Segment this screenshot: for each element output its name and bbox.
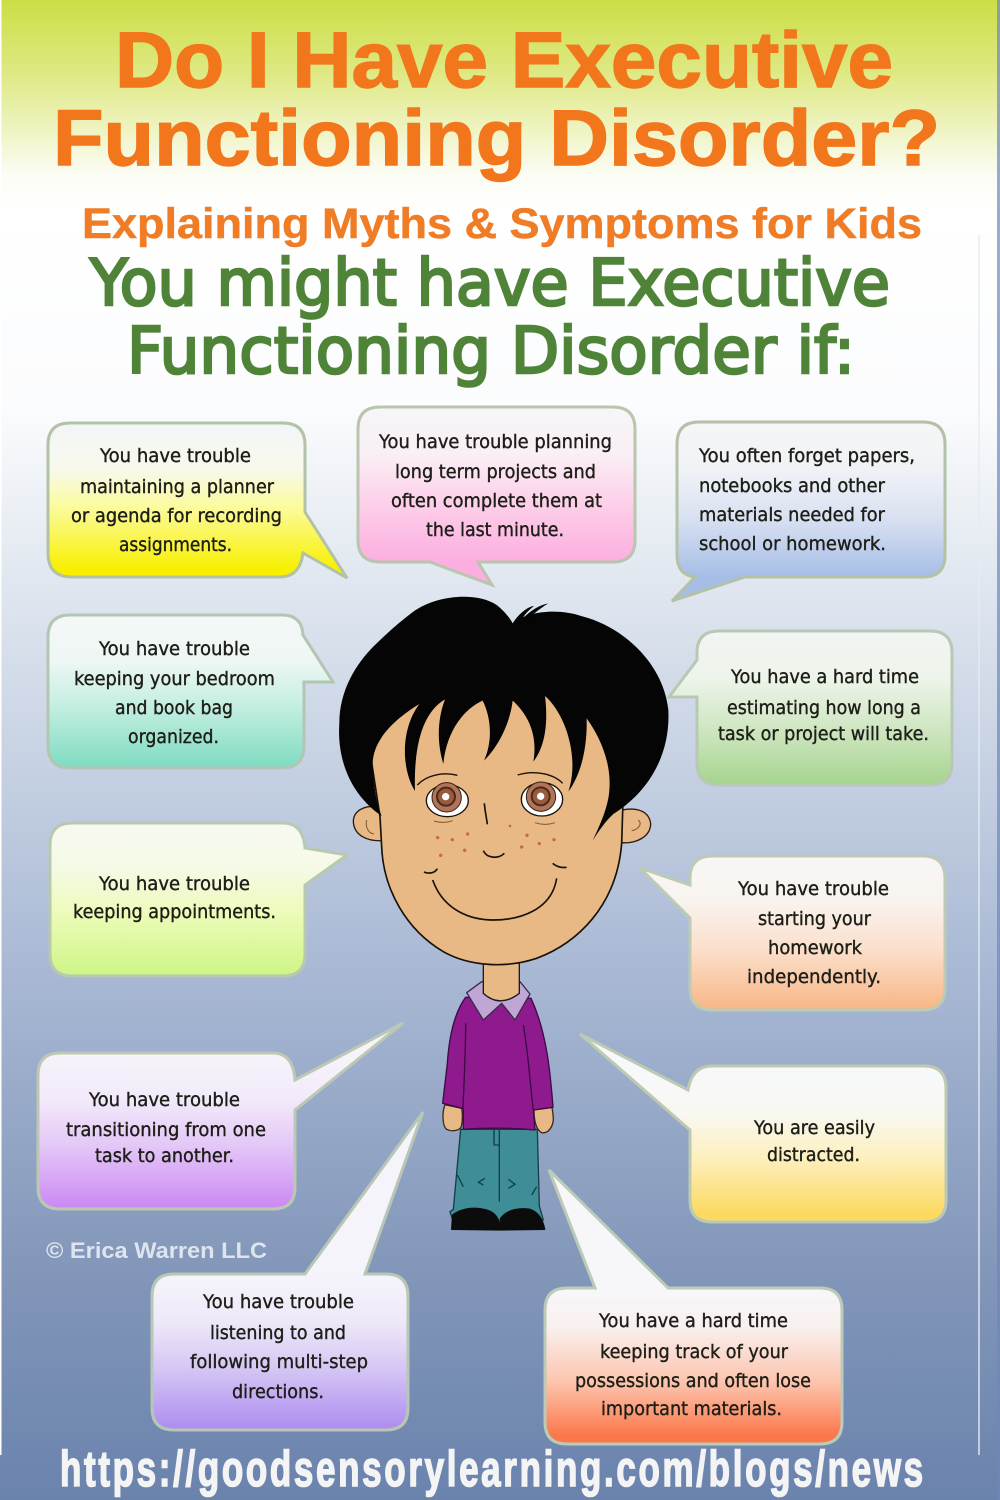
speech bubble: bedroom (48, 615, 333, 768)
boy head (339, 597, 668, 965)
speech bubble: distracted: distracted. (767, 1144, 860, 1166)
speech bubble: transitioning: task to another. (95, 1145, 234, 1167)
left eye (426, 783, 468, 817)
speech bubble: possessions: important materials. (601, 1398, 782, 1420)
speech bubble: estimating time: estimating how long a (727, 697, 921, 719)
right ear (617, 809, 651, 843)
left hand (443, 1105, 462, 1131)
speech bubble: distracted (580, 1034, 946, 1222)
speech bubble: homework (640, 856, 945, 1010)
speech bubble: transitioning: You have trouble (88, 1089, 240, 1111)
shoes (452, 1208, 545, 1230)
speech bubble: appointments: keeping appointments. (73, 901, 276, 923)
green heading: Functioning Disorder if: (127, 315, 855, 389)
speech bubble: planner: You have trouble (99, 445, 251, 467)
speech bubble: planner: maintaining a planner (80, 476, 274, 498)
speech bubble: homework: independently. (747, 966, 881, 988)
speech bubble: possessions (545, 1170, 842, 1444)
trousers (450, 1129, 543, 1220)
speech bubble: planning projects: long term projects and (395, 461, 596, 483)
speech bubble: distracted: You are easily (753, 1117, 875, 1139)
boy illustration (339, 597, 668, 1230)
speech bubble: homework: You have trouble (737, 878, 889, 900)
speech bubble: appointments (50, 823, 347, 976)
left eyebrow (417, 774, 457, 785)
face (367, 673, 623, 965)
title (53, 15, 940, 182)
speech bubble: forgets papers: You often forget papers, (698, 445, 915, 467)
title: Do I Have Executive (115, 15, 893, 104)
speech bubble: transitioning (38, 1023, 403, 1209)
speech bubble: forgets papers: school or homework. (699, 533, 886, 555)
speech bubble: bedroom: keeping your bedroom (74, 668, 275, 690)
speech bubble: estimating time (669, 631, 952, 785)
speech bubble: planning projects: You have trouble planning (378, 431, 612, 453)
speech bubble: multi-step directions (152, 1112, 423, 1430)
nose and smile (424, 803, 567, 920)
speech bubble: transitioning: transitioning from one (66, 1119, 266, 1141)
speech bubble: multi-step directions: listening to and (210, 1322, 346, 1344)
green heading (89, 247, 890, 389)
speech bubble: planning projects: often complete them at (391, 490, 602, 512)
speech bubble: homework: starting your (758, 908, 871, 930)
right eyebrow (518, 773, 563, 783)
green heading: You might have Executive (89, 247, 890, 321)
speech bubble: forgets papers: materials needed for (699, 504, 885, 526)
speech bubble: multi-step directions: directions. (232, 1381, 324, 1403)
speech bubble: planner: assignments. (119, 534, 232, 556)
speech bubble: planner (48, 423, 347, 578)
subtitle: Explaining Myths & Symptoms for Kids (82, 200, 922, 248)
stray hair (513, 603, 548, 623)
right hand (534, 1107, 553, 1133)
speech bubble: multi-step directions: You have trouble (202, 1291, 354, 1313)
right eye (521, 782, 563, 816)
speech bubble: bedroom: You have trouble (98, 638, 250, 660)
copyright: © Erica Warren LLC (46, 1238, 267, 1263)
speech bubble: appointments: You have trouble (98, 873, 250, 895)
speech bubble: estimating time: task or project will take. (718, 723, 929, 745)
title: Functioning Disorder? (53, 93, 940, 182)
boy body (443, 957, 553, 1230)
speech bubble: estimating time: You have a hard time (730, 666, 919, 688)
speech bubble: planner: or agenda for recording (71, 505, 282, 527)
speech bubble: forgets papers: notebooks and other (699, 475, 885, 497)
speech bubble: bedroom: and book bag (115, 697, 233, 719)
website url: https://goodsensorylearning.com/blogs/news (60, 1442, 923, 1498)
speech bubble: multi-step directions: following multi-step (190, 1351, 368, 1373)
collar (467, 982, 530, 1020)
freckles (436, 825, 556, 857)
left ear (353, 807, 383, 841)
neck (483, 957, 519, 1001)
speech bubble: planning projects: the last minute. (426, 519, 564, 541)
speech bubble: possessions: possessions and often lose (575, 1370, 811, 1392)
speech bubble: homework: homework (768, 937, 862, 959)
sweater (443, 997, 553, 1130)
speech bubble: bedroom: organized. (128, 726, 219, 748)
hair (339, 597, 668, 841)
speech bubble: forgets papers (672, 422, 945, 601)
speech bubble: possessions: keeping track of your (600, 1341, 788, 1363)
speech bubble: planning projects (358, 407, 635, 585)
speech bubble: possessions: You have a hard time (598, 1310, 788, 1332)
